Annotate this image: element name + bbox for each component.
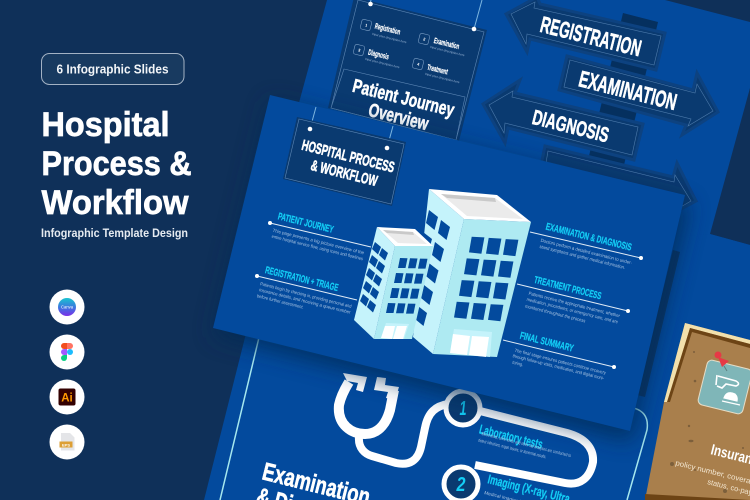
panel: patient journey overview: Examination <box>433 36 460 51</box>
text: laboratory tests: detect infections, organ issues, or abnormal results. <box>478 438 547 459</box>
icon: EPS file: EPS <box>62 442 70 448</box>
callout: final summary: toring. <box>512 360 524 367</box>
step 1 badge <box>446 391 480 425</box>
arrow sign: diagnosis <box>483 80 643 160</box>
large building <box>413 189 531 357</box>
subtitle: Infographic Template Design <box>41 228 188 240</box>
panel: patient journey overview: Input your description here <box>425 72 460 84</box>
panel: bottom slide <box>204 234 750 500</box>
panel: patient journey overview: Treatment <box>426 63 449 77</box>
slide frame outline <box>220 325 647 500</box>
callout: treatment process: monitored throughout the process <box>525 304 587 324</box>
panel: patient journey overview: Overview <box>366 100 431 135</box>
callout: registration and triage: before further assessment. <box>256 293 304 310</box>
icon: Figma <box>50 334 84 370</box>
text: imaging <box>484 471 572 500</box>
callout: final summary <box>503 331 616 381</box>
panel: patient journey overview: 2 <box>423 36 427 42</box>
icon: stethoscope tube <box>339 373 593 484</box>
panel: patient journey overview: Input your description here <box>430 45 465 57</box>
panel: patient journey overview: Registration <box>374 22 401 37</box>
label: hospital process and workflow: HOSPITAL PROCESS <box>300 137 396 176</box>
arrow sign: registration <box>506 0 665 70</box>
icon: red pin <box>714 352 729 371</box>
panel: patient journey overview: 4 <box>417 61 421 67</box>
text: laboratory tests: Blood tests, urine tests, and other lab analyses are conducted to <box>481 431 572 458</box>
callout: patient journey <box>268 211 371 261</box>
callout: registration and triage: REGISTRATION + TRIAGE <box>264 265 340 294</box>
panel: patient journey overview: Patient Journey <box>350 76 457 122</box>
icon: hand and service bell <box>697 359 750 415</box>
callout: registration and triage: insurance details, and receiving a queue number <box>259 287 351 315</box>
illustration: hospital buildings <box>354 189 531 357</box>
panel: patient journey overview: Diagnosis <box>367 48 390 62</box>
callout: final summary: The final stage ensures patients continue recovery <box>514 348 607 375</box>
arrow sign: examination: EXAMINATION <box>576 66 680 115</box>
arrow sign: diagnosis: DIAGNOSIS <box>530 106 611 147</box>
callout: treatment process: TREATMENT PROCESS <box>533 275 603 302</box>
callout: final summary: FINAL SUMMARY <box>519 331 575 355</box>
callout: registration and triage: Patients begin by checking in, providing personal and <box>260 281 352 309</box>
arrow sign: examination <box>559 56 718 135</box>
dark strip <box>637 250 680 397</box>
signpost pole <box>589 13 658 165</box>
badge: 6 Infographic Slides: 6 Infographic Slides <box>56 62 168 76</box>
panel: patient journey overview <box>328 0 487 141</box>
callout: patient journey: PATIENT JOURNEY <box>277 211 335 236</box>
icon: Canva <box>50 290 84 324</box>
title: Workflow <box>42 184 189 222</box>
callout: examination and diagnosis: stand symptoms and gather medical information. <box>539 244 626 270</box>
icon: Adobe Illustrator: Ai <box>61 392 73 404</box>
callout: examination and diagnosis: Doctors perform a detailed examination to under- <box>540 238 633 265</box>
arrow sign: treatment <box>540 146 696 215</box>
title: Process & <box>42 145 192 183</box>
panel: patient journey overview: Input your description here <box>365 57 400 69</box>
small building <box>354 227 433 339</box>
panel: corkboard <box>645 323 750 500</box>
callout: patient journey: entire hospital service flow, using icons and flowlines <box>271 234 364 261</box>
text: laboratory tests: Laboratory tests <box>478 421 544 452</box>
step 2 badge: 2 <box>456 474 466 496</box>
callout: patient journey: This page presents a big picture overview of the <box>272 228 365 255</box>
main slide shadow <box>213 100 690 442</box>
icon: Adobe Illustrator <box>50 380 84 414</box>
title: Hospital <box>42 106 170 144</box>
callout: treatment process <box>517 275 630 324</box>
callout: examination and diagnosis <box>530 222 643 270</box>
callout: treatment process: Patients receive the appropriate treatment, whether <box>528 291 621 318</box>
callout: treatment process: medication, procedures, or emergency care, and are <box>526 297 619 324</box>
panel: main slide <box>213 95 685 431</box>
label: hospital process and workflow <box>283 107 406 206</box>
panel: top slide <box>297 0 750 300</box>
panel: patient journey overview: 3 <box>358 47 362 53</box>
arrow sign: registration: REGISTRATION <box>538 11 644 61</box>
icon: Canva: Canva <box>61 304 74 310</box>
label: hospital process and workflow: & WORKFLOW <box>309 157 380 190</box>
callout: final summary: through follow-up visits, medication, and digital moni- <box>512 353 605 381</box>
panel: patient journey overview: Input your description here <box>372 32 407 44</box>
panel: patient journey overview: 1 <box>365 22 369 28</box>
badge: 6 Infographic Slides <box>42 54 184 84</box>
step 2 badge <box>444 467 478 500</box>
callout: registration and triage <box>255 265 357 315</box>
title <box>42 106 192 222</box>
callout: examination and diagnosis: EXAMINATION & DIAGNOSIS <box>545 222 633 254</box>
icon: EPS file <box>50 424 84 460</box>
arrow sign: treatment: TREATMENT <box>565 165 650 207</box>
step 1 badge: 1 <box>459 398 467 420</box>
